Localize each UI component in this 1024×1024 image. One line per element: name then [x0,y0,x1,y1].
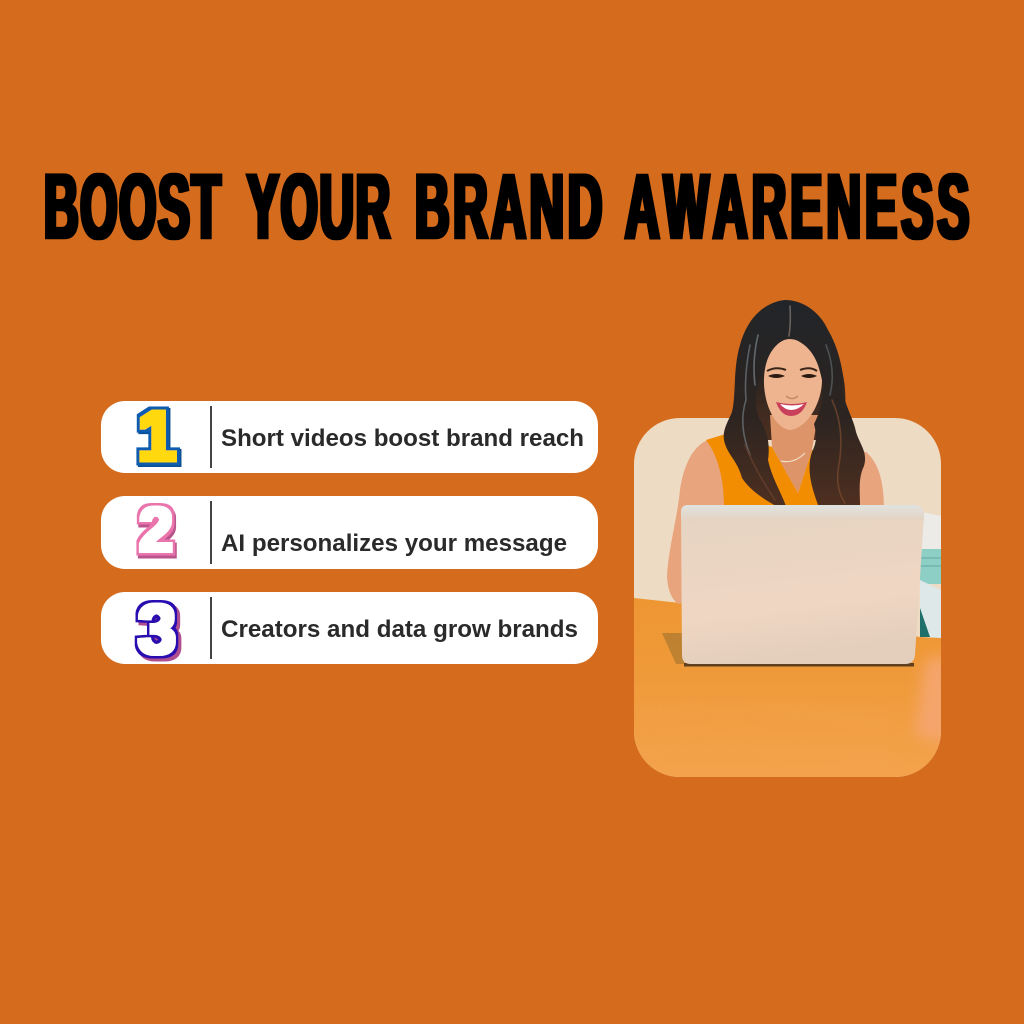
background objects on the right [922,512,941,552]
title [44,155,973,258]
nose [786,396,798,398]
neck and neckline [770,415,818,493]
left hair tress [724,306,790,506]
label 2: AI personalizes your message [221,530,567,557]
icon: number 1: 1 [138,397,176,475]
arms and shoulders [667,440,884,604]
right hair tress [790,306,865,505]
orange top [706,432,860,507]
eyes and brows [767,368,817,378]
label 1: Short videos boost brand reach [221,425,584,452]
title: YOUR [247,155,392,258]
panel: list of tips [101,397,598,668]
face [764,339,822,430]
title: BOOST [44,155,222,258]
card 1 [101,397,598,475]
title: BRAND [415,155,606,258]
necklace [781,453,805,462]
icon: number 3: 3 [138,590,176,668]
icon: number 2: 2 [139,496,173,565]
card 2 [101,496,598,569]
title: AWARENESS [625,155,973,258]
photo panel: woman at laptop [634,300,950,777]
card 3 [101,590,598,668]
smile [776,402,807,416]
laptop [662,505,924,666]
back hair [732,300,845,440]
hair highlights [743,306,845,503]
label 3: Creators and data grow brands [221,616,578,643]
